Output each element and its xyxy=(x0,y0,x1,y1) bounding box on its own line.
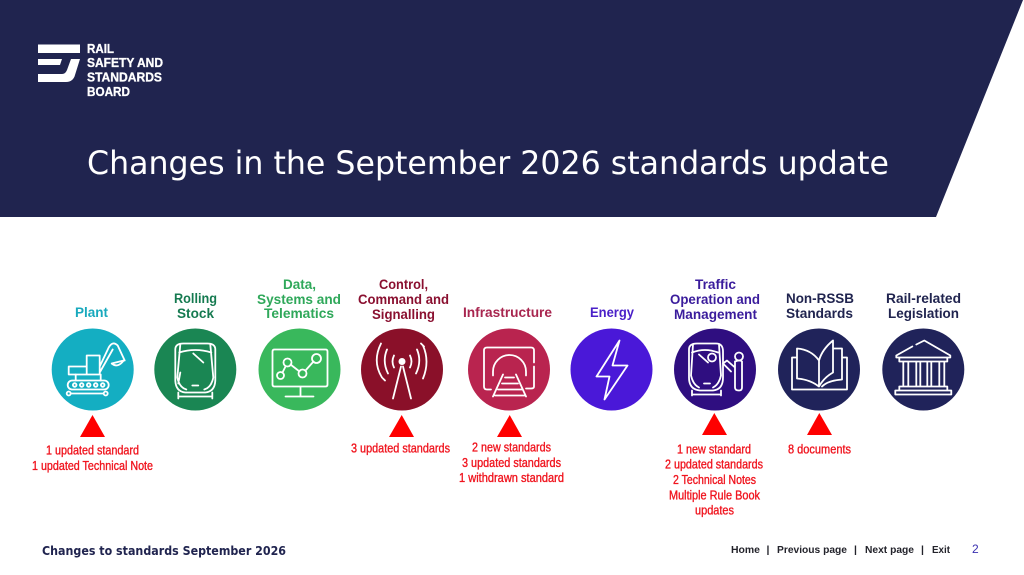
text: Infrastructure changes: 3 updated standards xyxy=(462,455,561,470)
logo wordmark: RAIL xyxy=(87,42,114,56)
footer navigation: | xyxy=(854,544,857,556)
icon: lightning bolt xyxy=(570,328,652,410)
footer navigation xyxy=(731,544,950,556)
heading: Control, Command and Signalling: Command and xyxy=(358,292,449,307)
marker: Traffic changes xyxy=(702,413,727,435)
panel: Energy xyxy=(570,305,652,410)
footer navigation: Home xyxy=(731,544,760,556)
heading: Rolling Stock: Stock xyxy=(177,306,214,321)
footer navigation: Previous page xyxy=(777,544,847,556)
panel: Infrastructure xyxy=(463,305,552,410)
text: Control changes: 3 updated standards xyxy=(351,440,450,456)
text: Traffic changes xyxy=(665,442,763,518)
text: Traffic changes: 2 Technical Notes xyxy=(673,472,756,487)
text: Traffic changes: updates xyxy=(695,502,734,518)
icon: open book xyxy=(778,328,860,410)
heading: Rolling Stock xyxy=(174,291,217,321)
title: Changes in the September 2026 standards update xyxy=(87,144,889,182)
footer navigation: Exit xyxy=(932,544,950,556)
text: Plant changes: 1 updated Technical Note xyxy=(32,458,153,473)
text: Infrastructure changes: 1 withdrawn standard xyxy=(459,470,564,485)
heading: Non-RSSB Standards: Standards xyxy=(786,306,853,321)
heading: Plant: Plant xyxy=(75,305,108,320)
heading: Data, Systems and Telematics: Telematics xyxy=(264,306,334,321)
text: Infrastructure changes: 2 new standards xyxy=(472,440,551,454)
footer navigation: | xyxy=(766,544,770,556)
panel: Data, Systems and Telematics xyxy=(257,277,341,410)
panel: Plant xyxy=(52,305,134,410)
footer title: Changes to standards September 2026 xyxy=(42,544,286,558)
logo mark xyxy=(38,44,80,82)
header banner xyxy=(0,0,1023,217)
heading: Control, Command and Signalling: Control, xyxy=(379,277,428,292)
heading: Infrastructure: Infrastructure xyxy=(463,305,552,320)
panel: Traffic Operation and Management xyxy=(670,277,760,410)
logo wordmark: BOARD xyxy=(87,85,130,99)
icon: tunnel xyxy=(468,328,550,410)
heading: Control, Command and Signalling xyxy=(358,277,449,322)
heading: Traffic Operation and Management xyxy=(670,277,760,322)
icon: chart monitor xyxy=(258,328,340,410)
panel: Control, Command and Signalling xyxy=(358,277,449,410)
marker: Infrastructure changes xyxy=(497,415,522,437)
panel: Non-RSSB Standards xyxy=(778,291,860,410)
heading: Traffic Operation and Management: Operation and xyxy=(670,292,760,307)
heading: Data, Systems and Telematics: Data, xyxy=(283,277,316,292)
icon: excavator xyxy=(52,328,134,410)
heading: Rail-related Legislation: Legislation xyxy=(888,306,959,321)
text: Plant changes: 1 updated standard xyxy=(46,442,139,458)
heading: Energy: Energy xyxy=(590,305,634,320)
text: Traffic changes: Multiple Rule Book xyxy=(669,488,760,502)
footer navigation: Next page xyxy=(865,544,914,556)
logo wordmark xyxy=(87,42,163,99)
text: Plant changes xyxy=(32,442,153,473)
logo wordmark: SAFETY AND xyxy=(87,56,163,70)
text: Traffic changes: 2 updated standards xyxy=(665,456,763,472)
heading: Traffic Operation and Management: Traffic xyxy=(695,277,736,292)
icon: train and operator xyxy=(674,328,756,410)
heading: Traffic Operation and Management: Management xyxy=(674,307,757,322)
heading: Rail-related Legislation: Rail-related xyxy=(886,291,961,306)
footer navigation: | xyxy=(921,544,924,556)
icon: signal mast xyxy=(361,328,443,410)
heading: Rail-related Legislation xyxy=(886,291,961,321)
heading: Non-RSSB Standards xyxy=(786,291,854,321)
logo xyxy=(38,42,163,99)
heading: Data, Systems and Telematics: Systems and xyxy=(257,292,341,307)
icon: train xyxy=(154,328,236,410)
heading: Data, Systems and Telematics xyxy=(257,277,341,321)
text: Traffic changes: 1 new standard xyxy=(677,442,751,456)
panel: Rail-related Legislation xyxy=(882,291,964,410)
text: Infrastructure changes xyxy=(459,440,564,485)
heading: Rolling Stock: Rolling xyxy=(174,291,217,306)
marker: Non-RSSB changes xyxy=(807,413,832,435)
page number: 2 xyxy=(972,542,979,556)
marker: Control changes xyxy=(389,415,414,437)
panel: Rolling Stock xyxy=(154,291,236,410)
text: Non-RSSB changes: 8 documents xyxy=(788,442,851,456)
logo wordmark: STANDARDS xyxy=(87,70,162,84)
heading: Control, Command and Signalling: Signalling xyxy=(372,307,435,322)
marker: Plant changes xyxy=(80,415,105,437)
icon: classical building xyxy=(882,328,964,410)
heading: Non-RSSB Standards: Non-RSSB xyxy=(786,291,854,306)
